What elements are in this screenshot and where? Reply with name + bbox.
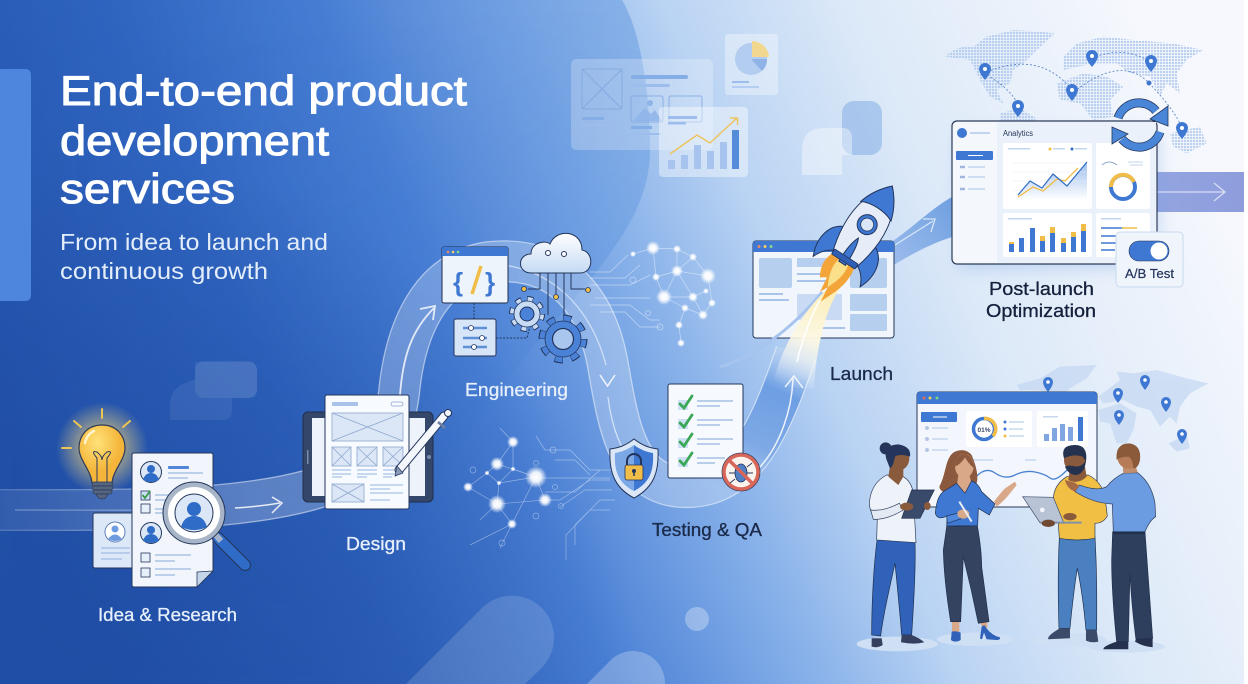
A/B test toggle card: A/B Test xyxy=(1125,267,1175,281)
icon: large gear xyxy=(543,319,583,359)
stage 1 icon: idea and research xyxy=(56,402,245,587)
person: man with raised arm xyxy=(1065,443,1165,653)
neural network lower xyxy=(463,428,615,560)
person: man in yellow sweater xyxy=(1023,445,1107,647)
icon: light bulb xyxy=(56,402,148,499)
dashboard sidebar xyxy=(956,128,993,189)
stage 4 icon: testing and QA xyxy=(610,384,760,498)
journey ribbon path xyxy=(0,240,816,531)
band exiting right xyxy=(1157,172,1244,212)
map pins xyxy=(1043,375,1187,444)
connector lines xyxy=(474,303,530,338)
team scene xyxy=(857,392,1165,653)
label: post-launch optimization: Post-launch xyxy=(989,279,1094,299)
slider card xyxy=(454,319,496,356)
stage 5 icon: launch xyxy=(720,169,919,388)
title xyxy=(60,67,467,212)
subtitle: continuous growth xyxy=(60,258,268,284)
neural network upper xyxy=(590,241,716,347)
code window xyxy=(442,247,508,303)
tablet xyxy=(303,412,433,502)
label: launch: Launch xyxy=(830,364,893,384)
A/B test toggle card xyxy=(1116,232,1183,287)
cloud with wiring xyxy=(520,233,591,315)
label: engineering: Engineering xyxy=(465,380,568,400)
label: design: Design xyxy=(346,534,406,554)
dashboard heading: Analytics xyxy=(1003,129,1033,138)
icon: security shield xyxy=(610,439,658,498)
label: idea and research: Idea & Research xyxy=(98,605,237,625)
icon: magnifying glass xyxy=(163,482,245,565)
ghost interface cards xyxy=(571,34,778,177)
stylus pen xyxy=(395,410,452,476)
label: testing and QA: Testing & QA xyxy=(652,520,762,540)
title: End-to-end product xyxy=(60,67,467,114)
rocket trail xyxy=(772,288,840,388)
person: woman in blue blouse xyxy=(935,450,1017,646)
stage 2 icon: design xyxy=(303,395,452,509)
image right edge strip xyxy=(1244,0,1248,684)
bar chart card xyxy=(1003,213,1092,257)
label: post-launch optimization: Optimization xyxy=(986,301,1096,321)
label: post-launch optimization xyxy=(986,279,1096,321)
donut chart card xyxy=(1096,143,1150,209)
subtitle xyxy=(60,229,328,284)
code window: } xyxy=(485,267,495,297)
icon: small gear xyxy=(512,300,542,328)
ghost card: pie chart xyxy=(725,34,778,95)
band to dashboard xyxy=(890,197,952,266)
code window: { xyxy=(453,267,463,297)
title: development xyxy=(60,117,329,164)
line chart card xyxy=(1003,143,1092,209)
icon: rocket xyxy=(791,169,919,318)
checklist xyxy=(668,384,743,478)
ghost card: rising bar chart xyxy=(659,107,748,177)
website window xyxy=(753,241,894,338)
arrow: ribbon 1 xyxy=(235,497,282,513)
map pins xyxy=(979,50,1188,139)
arrow: ribbon 2 xyxy=(400,306,435,395)
left accent tab xyxy=(0,69,31,301)
title: services xyxy=(60,165,235,212)
stage 3 icon: engineering xyxy=(442,233,591,359)
ghost card: wireframe xyxy=(571,59,713,150)
trail highlight xyxy=(797,300,820,362)
stage 6 dashboard: post-launch optimization xyxy=(952,121,1158,268)
research document xyxy=(132,453,213,587)
icon: bug blocked badge xyxy=(722,453,760,491)
back profile card xyxy=(93,513,138,568)
wireframe sheet xyxy=(325,395,409,509)
world map bottom xyxy=(1017,365,1208,452)
subtitle: From idea to launch and xyxy=(60,229,328,255)
icon: sync arrows xyxy=(1112,103,1168,147)
arrow: ribbon 3 xyxy=(600,375,615,386)
swoosh behind trail xyxy=(720,292,822,367)
person: woman with tablet xyxy=(857,442,938,651)
progress lines card xyxy=(1096,213,1150,257)
world map top xyxy=(945,30,1207,153)
presentation screen: 01% xyxy=(977,427,991,434)
arrow: ribbon 4 xyxy=(760,376,803,467)
presentation screen xyxy=(917,392,1097,507)
